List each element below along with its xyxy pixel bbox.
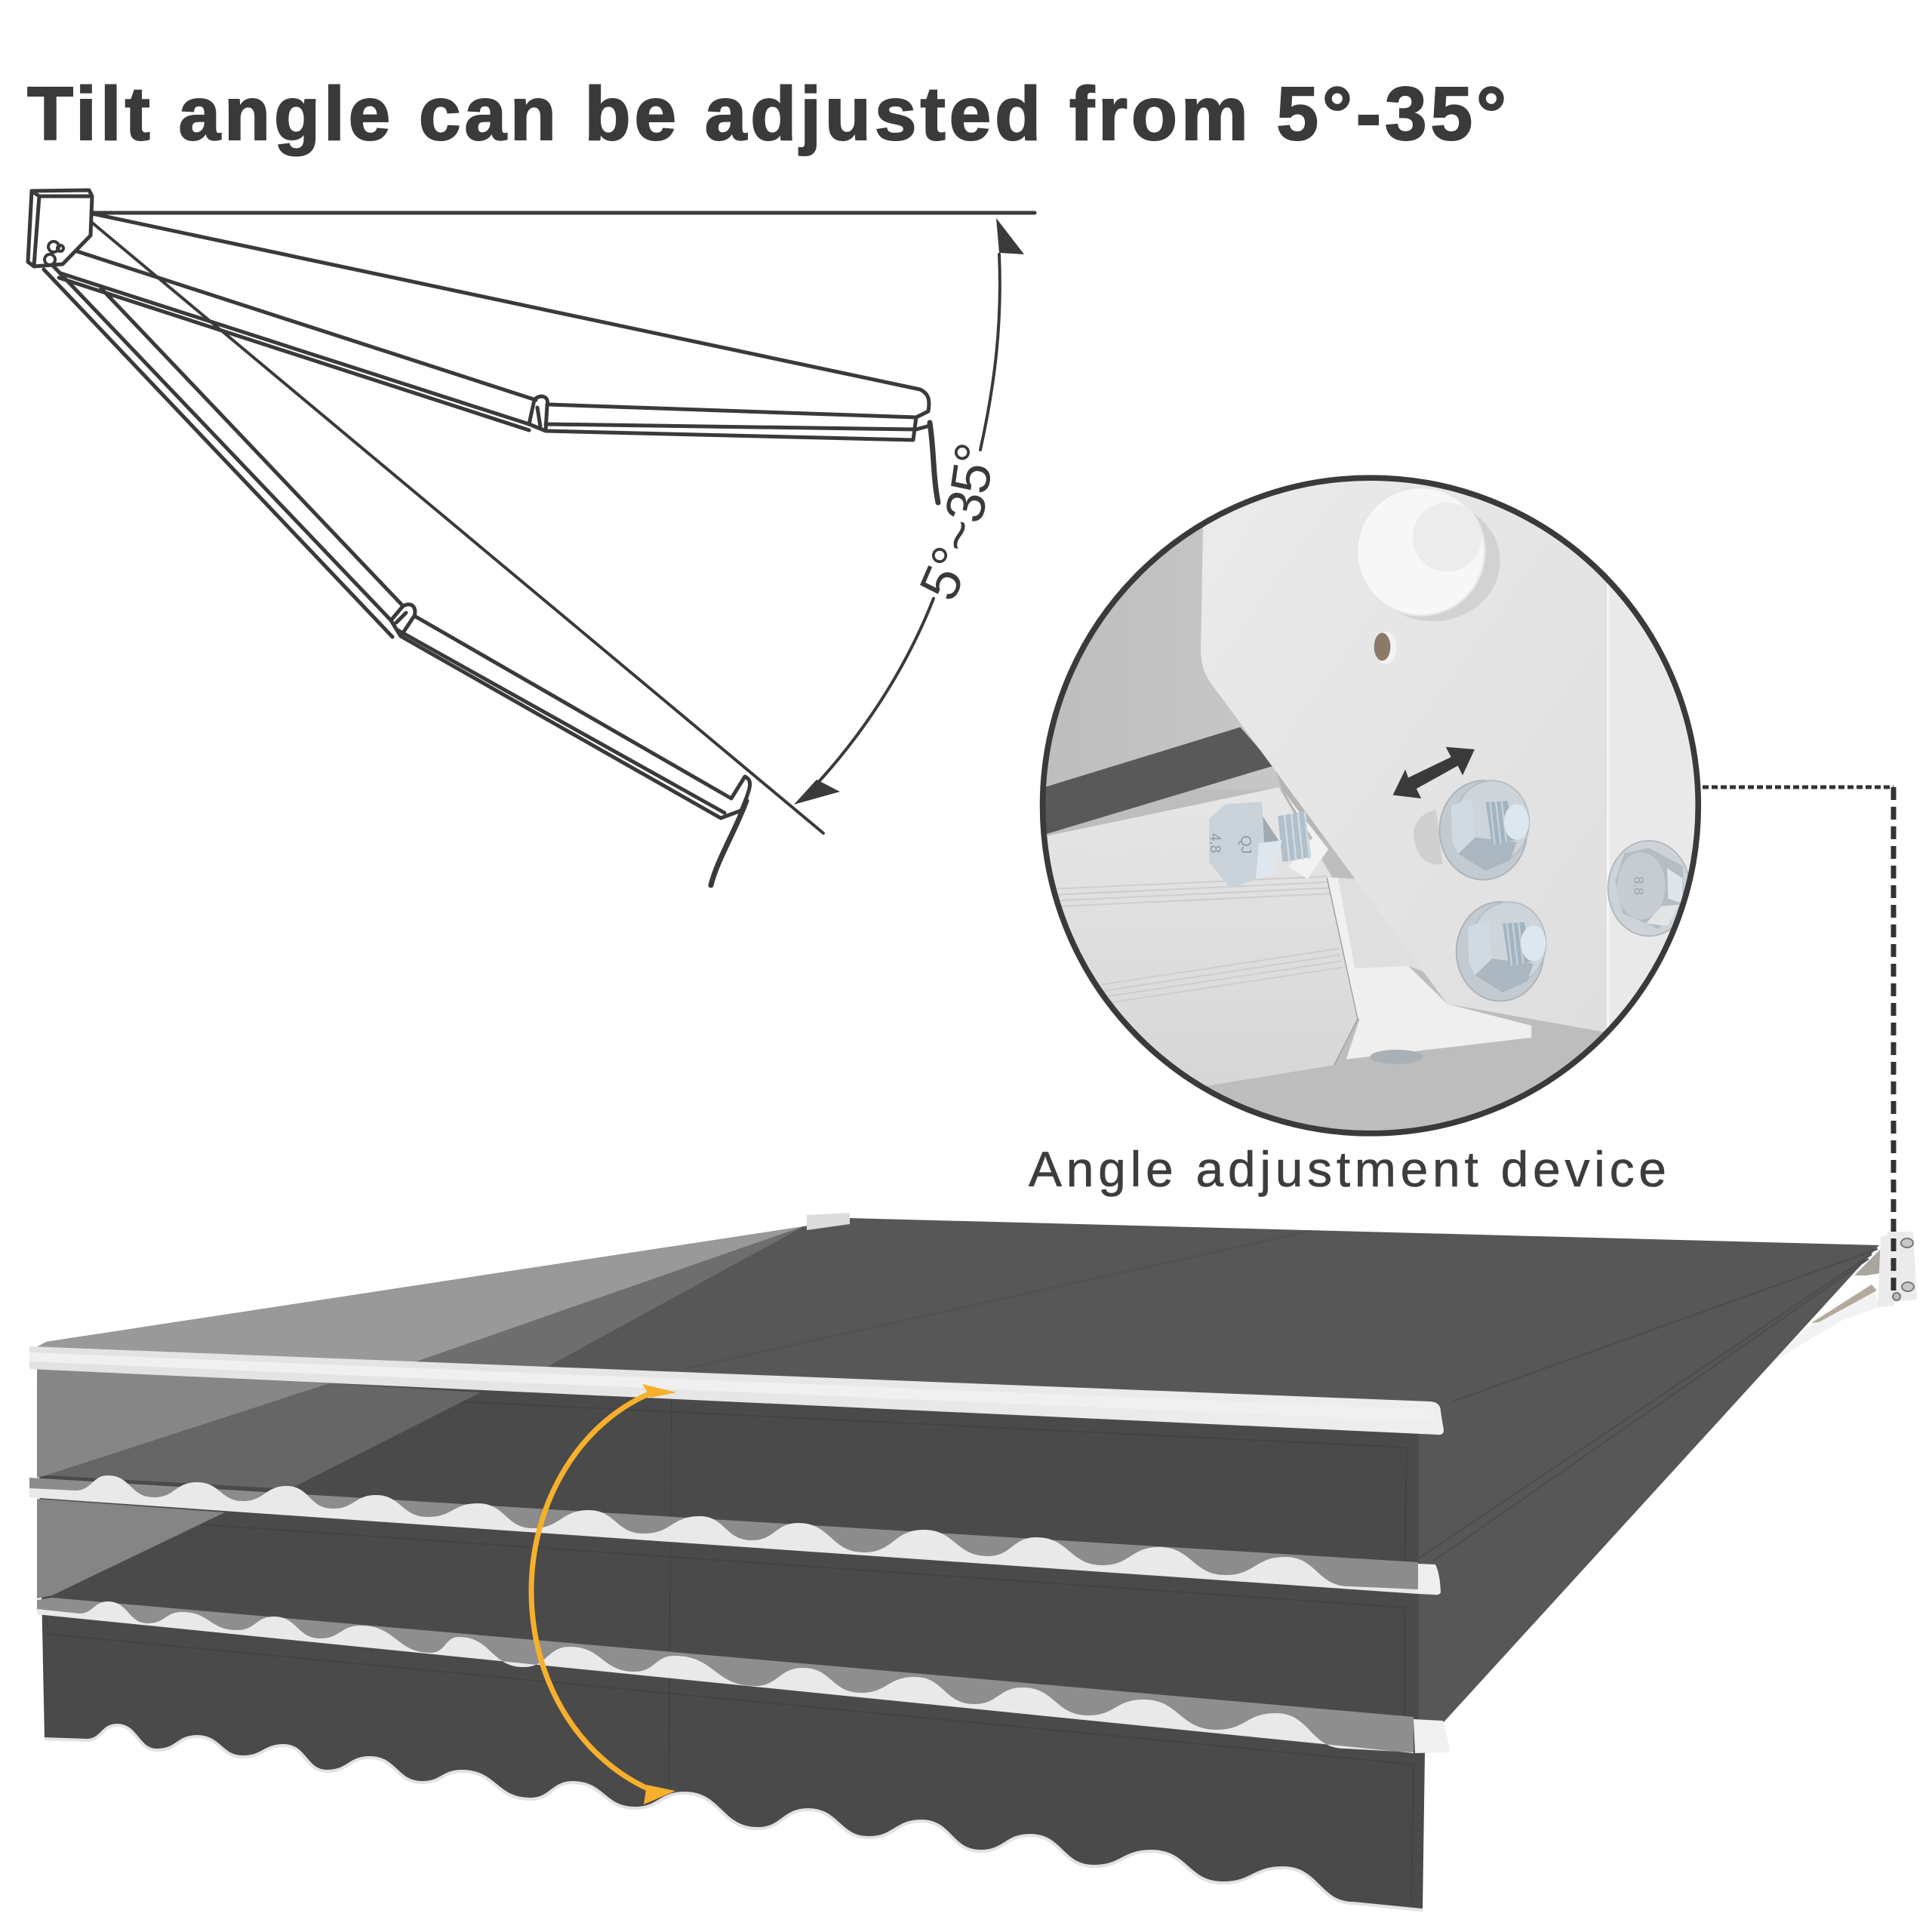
ghost shaded surface [404,1226,804,1370]
dashed leader line [1703,787,1894,1295]
bracket bolts [45,242,63,265]
upper arm position [59,214,930,440]
lower valance tail [711,801,746,885]
canopy seams [684,1231,1878,1561]
lowest rail end cap [1414,1719,1450,1753]
right panel [1609,586,1695,1026]
wall bracket [28,190,92,266]
under bracket [1346,966,1531,1060]
left hinge [807,1213,850,1230]
detail circle: angle adjustment device [1033,467,1713,1141]
canopy top surface [46,1218,1879,1723]
ghost valance lower [37,1499,225,1598]
space behind plate [1338,878,1423,972]
front seams [37,1381,1414,1902]
slot bolt [1439,780,1529,880]
middle rail end cap [1418,1564,1441,1595]
front valance panel [37,1366,1425,1910]
lower arm position [44,266,750,818]
left bolt: 4.8 [1207,833,1223,853]
angle label: 5°~35° [920,445,990,599]
yellow tilt arrow [531,1384,676,1804]
right arm [1766,1249,1881,1366]
extrusion arm [1033,787,1365,1093]
white cap [1357,488,1484,616]
lower section: awning [29,1213,1917,1910]
lowest rail wave [37,1601,1414,1753]
lowest rail band [37,1598,1414,1753]
angle arc [805,254,1000,796]
diagram: arm tilt line drawing [28,190,1035,885]
panel edge highlight [1607,583,1609,1028]
bottom rivet [1371,1050,1423,1064]
lower bolt [1457,902,1546,1001]
arc arrowheads [794,218,1024,804]
horizontal reference line [92,211,1035,214]
left bolt: QJ [1238,835,1254,854]
middle rail band [29,1478,1418,1594]
valance hem edge [45,1725,1423,1910]
double arrow [1393,747,1475,798]
ghost shaded band [46,1383,481,1489]
ghost valance upper [37,1369,330,1478]
middle rail wave [29,1475,1418,1594]
lower reference line [92,223,823,833]
top rail [29,1346,1444,1435]
main plate [1201,467,1608,1033]
plate cap shadow [1398,513,1500,622]
white bolt spacer [1285,794,1328,878]
adjust slot [1414,810,1442,865]
upper valance tail [930,423,938,503]
right wall bracket [1878,1232,1917,1307]
caption: Angle adjustment device [1029,1141,1666,1197]
right bolt [1608,841,1690,936]
right bolt: 8.8 [1632,876,1647,895]
dark fabric band [1033,728,1274,838]
ghost light surface [29,1226,804,1366]
shadow under plate [1276,772,1327,842]
plate hole [1374,632,1397,664]
background [1046,527,1282,789]
left bolt [1207,801,1311,888]
title: Tilt angle can be adjusted from 5°-35° [27,72,1506,156]
circle outline [1043,478,1698,1134]
